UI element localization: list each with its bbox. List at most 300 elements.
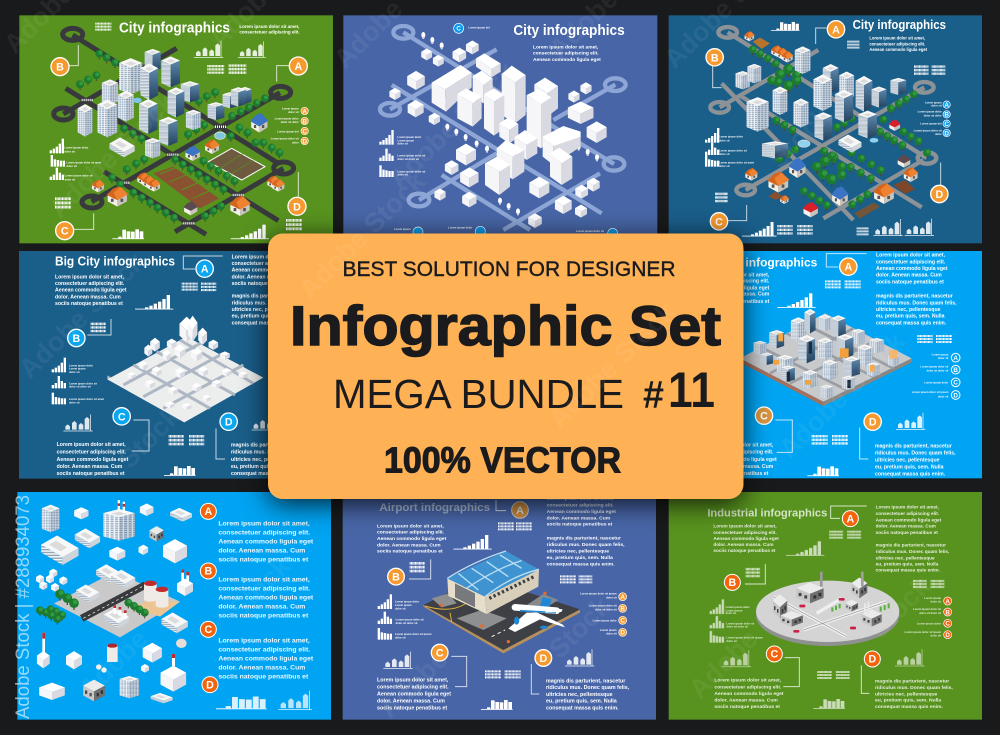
badges: D (206, 679, 214, 691)
disc factory model (756, 572, 899, 646)
city towers (78, 49, 268, 158)
text block bottom left: Lorem ipsum dolor sit amet, (57, 442, 126, 448)
text blocks: Aenean commodo ligula eget (714, 691, 784, 697)
text block top right: consectetuer adipiscing elit. (232, 261, 302, 267)
legend badges: Lorem ipsum (394, 227, 411, 231)
text blocks: dolor. Aenean massa. Cum (713, 542, 773, 548)
chart labels: Lorem ipsum dolor sit (726, 622, 754, 626)
title: Industrial infographics (707, 507, 827, 519)
mini legend: Lorem ipsum dolor (275, 116, 299, 120)
intro text: Lorem ipsum dolor sit amet, (239, 24, 299, 29)
panel: industrial infographic (669, 492, 982, 720)
text block top right: ultricies nec, pellentesque (547, 549, 609, 555)
mini legend: A (944, 102, 949, 109)
connector lines (775, 254, 868, 459)
text block top right: consectetuer adipiscing elit. (547, 503, 614, 509)
text block bottom left: dolor. Aenean massa. Cum (57, 464, 123, 470)
badges: A (201, 264, 209, 276)
text block top right: ultricies nec, pellentesque (876, 307, 941, 313)
mini legend: dolor sit dolor (924, 113, 942, 117)
text block bottom left: sociis natoque penatibus et (377, 705, 447, 711)
text block bottom left: Aenean commodo ligula eget (705, 457, 777, 463)
text blocks: dolor. Aenean massa. Cum (218, 664, 305, 671)
mini legend (580, 592, 627, 637)
badges: D (225, 417, 233, 429)
watermarks: diagonal repeats: Adobe Stock (43, 86, 182, 224)
connector lines (713, 28, 941, 221)
panel: white city model on indigo (343, 15, 657, 238)
text block bottom right: ultricies nec, pellentesque (231, 457, 296, 463)
text blocks (713, 505, 953, 710)
text blocks: dolor. Aenean massa. Cum (218, 603, 305, 610)
mini legend: Lorem ipsum dolor sit (920, 365, 948, 369)
text blocks: ridiculus mus. Donec quam felis, (876, 549, 949, 555)
houses (91, 139, 285, 216)
charts (705, 22, 945, 236)
towers (735, 46, 906, 158)
mini legend: B (944, 112, 949, 119)
mini legend: Lorem ipsum dol (920, 122, 942, 126)
title: Airport infographics (379, 502, 490, 514)
text blocks: Lorem ipsum dolor sit amet, (218, 638, 310, 645)
text block top right: eu, pretium quis, sem. Nulla (547, 555, 613, 561)
mini legend: Lorem ipsum (925, 100, 942, 104)
text block bottom right: eu, pretium quis, sem. Nulla (546, 699, 617, 705)
title: Big City infographics (55, 255, 175, 269)
hangar (447, 551, 539, 614)
footer label: 100% VECTOR (384, 440, 621, 480)
mini legend: C (944, 121, 949, 128)
chart labels (64, 146, 101, 181)
text blocks: sociis natoque penatibus et (218, 612, 309, 619)
mini legend: dolor (292, 140, 299, 144)
text blocks: Aenean commodo ligula eget (218, 656, 314, 663)
text block top right: sociis natoque penatibus et (876, 279, 944, 285)
farm fields (153, 148, 265, 208)
text block bottom right: consequat massa quis enim. (231, 471, 302, 477)
roads (710, 27, 936, 220)
charts (378, 523, 594, 710)
text block top right: dolor. Aenean massa. Cum (876, 273, 942, 279)
badges: A (844, 262, 852, 274)
text blocks: magnis dis parturient, nascetur (876, 543, 946, 549)
chart labels: Lorem ipsum dolor sit amet (69, 397, 104, 401)
text block bottom right: eu, pretium quis, sem. Nulla (231, 464, 300, 470)
mini legend: Lorem ipsum dolor sit (914, 129, 942, 133)
text block top right: sociis natoque penatibus et (547, 522, 613, 528)
legend badges: C (456, 26, 461, 33)
watermarks: diagonal repeats: Stock (543, 590, 617, 664)
text block top left: consectetuer adipiscing elit. (377, 530, 445, 536)
text block top left: consectetuer adipiscing elit. (700, 279, 770, 285)
text block top right: Lorem ipsum dolor sit amet, (547, 496, 614, 502)
badges A B C D: A (294, 61, 302, 73)
roads (380, 26, 626, 230)
badges: A (846, 513, 854, 525)
charts with labels: dolor sit (397, 173, 408, 177)
text block bottom right: ridiculus mus. Donec quam felis, (231, 450, 312, 456)
chart labels (726, 605, 763, 643)
white skyscrapers (432, 53, 581, 195)
chart labels: Lorem ipsum (395, 603, 412, 607)
panel: factory set on bright blue (17, 492, 331, 720)
connector lines (69, 45, 298, 229)
text blocks: consequat massa quis enim. (876, 568, 940, 574)
text block top right: ridiculus mus. Donec quam felis, (547, 542, 625, 548)
text blocks: dolor. Aenean massa. Cum (876, 524, 936, 530)
text block top right: consectetuer adipiscing elit. (876, 259, 946, 265)
bundle number: 11 (668, 362, 715, 418)
badges: A (516, 505, 524, 517)
badges A B C D: B (56, 62, 64, 74)
badges: B (204, 566, 212, 578)
text blocks: sociis natoque penatibus et (218, 556, 309, 563)
title: City infographics (719, 256, 818, 270)
charts with labels: Lorem ipsum dolor sit (397, 169, 425, 173)
mini legend (271, 107, 308, 145)
badges: B (728, 577, 736, 589)
mini legend: dolor sit dolor (281, 120, 299, 124)
text blocks: eu, pretium quis, sem. Nulla (875, 698, 941, 704)
subtitle: MEGA BUNDLE (333, 371, 624, 417)
text block top left: Lorem ipsum dolor sit amet, (55, 274, 125, 280)
badges A B C D: D (293, 201, 301, 213)
title: City infographics (513, 23, 625, 39)
text block top right: sociis natoque penatibus et (232, 281, 300, 287)
mini legend: A (302, 108, 307, 115)
badges (755, 258, 881, 430)
chart labels: Lorem ipsum (726, 608, 743, 612)
chart labels: dolor sit (65, 177, 75, 181)
mini legend: A (953, 355, 958, 362)
mini legend: dolor sit (606, 632, 617, 636)
mini legend (914, 100, 950, 137)
mini legend: Lorem ipsum (600, 628, 617, 632)
isometric colored city (740, 309, 912, 406)
badges (706, 21, 948, 230)
watermarks: diagonal repeats: Adobe (683, 624, 764, 704)
text block top right: consequat massa quis enim. (232, 320, 302, 326)
text block top left: Aenean commodo ligula eget (377, 536, 447, 542)
text blocks: consectetuer adipiscing elit. (218, 530, 310, 537)
mini legend: Lorem ipsum (924, 596, 942, 600)
text blocks: consectetuer adipiscing elit. (218, 586, 310, 593)
mini legend: D (953, 392, 958, 399)
mini legend: C (620, 618, 625, 625)
text blocks: dolor. Aenean massa. Cum (714, 698, 778, 704)
chart labels: dolor sit dolor sit (396, 621, 417, 625)
mini legend: B (620, 606, 625, 613)
badges: A (204, 506, 212, 518)
orange title card (268, 234, 744, 499)
text blocks: eu, pretium quis, sem. Nulla (876, 561, 939, 567)
text block top left: Aenean commodo ligula eget (698, 286, 770, 292)
text block bottom left: sociis natoque penatibus et (700, 471, 769, 477)
watermarks: diagonal repeats: Stock (863, 570, 937, 644)
text block bottom right: ultricies nec, pellentesque (875, 458, 940, 464)
factory buildings and cooling towers (36, 564, 168, 628)
charts (50, 24, 302, 239)
mini legend: Lorem ipsum dolor sit ipsum (905, 630, 942, 634)
text blocks: consectetuer adipiscing elit. (713, 530, 777, 536)
charts with labels (379, 130, 425, 177)
charts (216, 690, 312, 710)
chart labels: Lorem ipsum dolor sit amet (66, 160, 101, 164)
text block top left: sociis natoque penatibus et (55, 301, 123, 307)
title: City infographics (853, 17, 946, 32)
watermarks: diagonal repeats: Adobe Stock (773, 326, 912, 464)
chart labels (719, 135, 754, 168)
airplane (508, 597, 565, 632)
charts with labels: dolor sit dolor sit (397, 157, 419, 161)
mini legend: C (302, 128, 307, 135)
mini legend: Lorem ipsum dolor sit ipsum (580, 592, 617, 596)
watermarks: diagonal repeats: Stock (113, 400, 187, 474)
intro text: consectetuer adipiscing elit. (533, 51, 599, 57)
charts (777, 281, 952, 476)
mini legend: Lorem ipsum dolor (924, 380, 948, 384)
panel: big city infographic (19, 251, 313, 479)
badges: B (711, 52, 719, 64)
badges: D (935, 189, 943, 201)
badges (200, 503, 218, 693)
connector lines (409, 500, 539, 694)
mini legend: dolor sit (931, 104, 942, 108)
text block bottom left: Lorem ipsum dolor sit amet, (377, 678, 449, 684)
chart labels: dolor sit (395, 606, 406, 610)
mini legend: dolor sit dolor sit (919, 611, 941, 615)
mini legend: Lorem ipsum (932, 353, 949, 357)
mini legend: dolor (935, 132, 942, 136)
text blocks: consectetuer adipiscing elit. (714, 684, 782, 690)
connector lines (745, 506, 869, 693)
mini legend: D (302, 138, 307, 145)
text block top left: dolor. Aenean massa. Cum (55, 294, 121, 300)
chart labels: Lorem ipsum dolor (726, 605, 750, 609)
text blocks: Lorem ipsum dolor sit amet, (218, 577, 310, 584)
chart labels: Lorem ipsum dolor sit (396, 618, 424, 622)
chart labels: Lorem ipsum (69, 367, 86, 371)
badges (68, 260, 237, 430)
charts (52, 284, 281, 476)
badges: C (118, 411, 126, 423)
badges: D (868, 654, 876, 666)
text block top right: Aenean commodo ligula eget (876, 266, 948, 272)
text block bottom right: magnis dis parturient, nascetur (875, 443, 952, 449)
text block top right: magnis dis parturient, nascetur (547, 535, 621, 541)
text block top left: Lorem ipsum dolor sit amet, (700, 272, 770, 278)
small blocks (389, 40, 607, 228)
text block top right: Lorem ipsum dolor sit amet, (876, 253, 946, 259)
charts with labels: dolor sit (397, 142, 408, 146)
chart labels: dolor sit (69, 400, 80, 404)
panel: green city infographic (19, 15, 333, 243)
text block top right: magnis dis parturient, nascetur (876, 294, 953, 300)
text block top left: consectetuer adipiscing elit. (55, 281, 125, 287)
watermarks: diagonal repeats: Adobe (373, 644, 454, 724)
badges: C (436, 648, 444, 660)
chart labels: dolor sit (719, 152, 730, 156)
mini legend: Lorem ipsum dolor sit (271, 137, 299, 141)
badges: C (204, 624, 212, 636)
legend badges: Lorem ipsum dolor (448, 226, 472, 230)
text block top left: dolor. Aenean massa. Cum (377, 542, 441, 548)
main heading: Infographic Set (290, 294, 721, 357)
badges: C (770, 649, 778, 661)
text block bottom left: Aenean commodo ligula eget (57, 457, 129, 463)
text blocks: consequat massa quis enim. (875, 704, 943, 710)
text block top right: ridiculus mus. Donec quam felis, (876, 300, 957, 306)
badges: C (715, 216, 723, 228)
text block bottom right: eu, pretium quis, sem. Nulla (875, 464, 944, 470)
watermarks: diagonal repeats: Stock (223, 550, 297, 624)
chart labels: Lorem ipsum dolor sit (69, 381, 97, 385)
chart labels: dolor sit (64, 150, 75, 154)
mini legend: Lorem ipsum dolor sit (589, 604, 617, 608)
text block top right: eu, pretium quis, sem. Nulla (876, 314, 945, 320)
text block top right: eu, pretium quis, sem. Nulla (232, 314, 300, 320)
text block top left: dolor. Aenean massa. Cum (704, 292, 770, 298)
chart labels: Lorem ipsum dolor sit amet (719, 161, 754, 165)
chart labels: dolor sit (726, 639, 737, 643)
card background (268, 234, 744, 499)
text block bottom right: consequat massa quis enim. (546, 705, 619, 711)
text blocks: magnis dis parturient, nascetur (875, 678, 949, 684)
mini legend: Lorem ipsum dolor (918, 110, 942, 114)
airport ground (423, 577, 580, 653)
text blocks: consectetuer adipiscing elit. (218, 647, 310, 654)
text blocks: Lorem ipsum dolor sit amet, (714, 678, 782, 684)
text block top left: Aenean commodo ligula eget (55, 288, 127, 294)
mini legend: dolor sit (931, 634, 941, 638)
chart labels: Lorem ipsum dolor (395, 600, 419, 604)
bundle number (643, 362, 715, 418)
chart labels: dolor sit (69, 370, 80, 374)
mini legend: B (945, 609, 950, 616)
mini legend: Lorem ipsum dolor sit ipsum (912, 390, 949, 394)
chart labels (69, 363, 104, 404)
text block top right: Aenean commodo ligula eget (232, 268, 304, 274)
mini legend: dolor sit (938, 394, 948, 398)
factory site base (54, 572, 180, 637)
tagline: BEST SOLUTION FOR DESIGNER (342, 258, 676, 281)
panel: teal city infographic (669, 15, 982, 243)
text block top left: sociis natoque penatibus et (377, 549, 443, 555)
text block top right: dolor. Aenean massa. Cum (232, 274, 298, 280)
trees (76, 50, 283, 223)
badges: A (832, 24, 840, 36)
chart labels: Lorem ipsum dolor sit (719, 149, 747, 153)
text block bottom left: consectetuer adipiscing elit. (704, 450, 774, 456)
text block bottom left: dolor. Aenean massa. Cum (708, 464, 774, 470)
chart labels: dolor sit (66, 164, 77, 168)
mini legend: B (302, 118, 307, 125)
text blocks: Aenean commodo ligula eget (876, 517, 942, 523)
badges (724, 511, 880, 667)
legend badges (394, 23, 618, 238)
text block bottom left: consectetuer adipiscing elit. (377, 685, 449, 691)
text block top right: Aenean commodo ligula eget (547, 509, 616, 515)
text block top right: consequat massa quis enim. (547, 562, 615, 568)
text blocks: consectetuer adipiscing elit. (876, 511, 939, 517)
mini legend (912, 353, 960, 399)
charts with labels: Lorem ipsum dolor sit (397, 154, 425, 158)
mini legend: Lorem ipsum (282, 107, 299, 111)
charts with labels: Lorem ipsum (397, 138, 415, 142)
text block top right: magnis dis parturient, nascetur (232, 294, 308, 300)
text block bottom right: magnis dis parturient, nascetur (546, 678, 625, 684)
mini legend: Lorem ipsum dolor (917, 621, 941, 625)
text blocks: ultricies nec, pellentesque (876, 555, 935, 561)
chart labels: dolor sit (719, 164, 730, 168)
text blocks: Lorem ipsum dolor sit amet, (218, 521, 310, 528)
charts with labels: Lorem ipsum dolor (397, 135, 421, 139)
mini legend (905, 596, 952, 639)
intro text: consectetuer adipiscing elit. (869, 41, 925, 46)
isometric white city (107, 316, 263, 422)
watermarks: diagonal repeats: Adobe Stock (293, 166, 432, 304)
text blocks: dolor. Aenean massa. Cum (218, 547, 305, 554)
text block top left: Lorem ipsum dolor sit amet, (377, 523, 444, 529)
watermarks: diagonal repeats: Adobe (73, 624, 154, 704)
chart labels: dolor sit (719, 138, 730, 142)
text blocks: Aenean commodo ligula eget (713, 536, 779, 542)
text blocks: ultricies nec, pellentesque (875, 692, 938, 698)
panel: airport infographic (343, 496, 656, 720)
badges: B (72, 333, 80, 345)
text block bottom right: magnis dis parturient, nascetur (231, 443, 308, 449)
text blocks: sociis natoque penatibus et (713, 548, 776, 554)
text block bottom right: consequat massa quis enim. (875, 472, 946, 478)
chart labels (395, 600, 432, 639)
badges A B C D (51, 57, 307, 240)
road crossings (82, 100, 245, 223)
title: city infographics: City infographics (119, 20, 230, 36)
chart labels: dolor sit (726, 611, 736, 615)
text block bottom right: ridiculus mus. Donec quam felis, (875, 450, 956, 456)
badges: C (760, 411, 768, 423)
connector lines (87, 256, 225, 459)
chart labels: dolor sit dolor sit (69, 385, 91, 389)
forests (749, 45, 931, 211)
mini legend: Lorem ipsum dol (277, 129, 299, 133)
text block bottom right: ultricies nec, pellentesque (546, 692, 613, 698)
intro text: Lorem ipsum dolor sit amet, (869, 36, 925, 41)
badges: D (539, 653, 547, 665)
text blocks: sociis natoque penatibus et (714, 704, 780, 710)
watermarks: diagonal repeats: Stock (763, 100, 837, 174)
chart labels: Lorem ipsum dolor sit ipsum (395, 632, 432, 636)
mini legend: C (945, 621, 950, 628)
intro text: Aenean commodo ligula eget (533, 57, 601, 63)
mini legend: D (620, 630, 625, 637)
mini legend: Lorem ipsum dolor sit (913, 607, 941, 611)
watermark: stock id: Adobe Stock | #288934073 (12, 495, 34, 719)
mini legend: C (953, 380, 958, 387)
mini legend: dolor sit (288, 110, 299, 114)
mini legend: B (953, 367, 958, 374)
charts (710, 532, 944, 709)
text block bottom left: dolor. Aenean massa. Cum (377, 698, 445, 704)
chart labels: dolor sit dolor sit (726, 625, 748, 629)
text block top right: ultricies nec, pellentesque (232, 307, 296, 313)
mini legend: A (945, 598, 950, 605)
text block top left: sociis natoque penatibus et (701, 299, 770, 305)
small trees (421, 32, 599, 215)
text blocks: Lorem ipsum dolor sit amet, (876, 505, 939, 511)
text block bottom left: consectetuer adipiscing elit. (57, 450, 127, 456)
mini legend: D (945, 632, 950, 639)
